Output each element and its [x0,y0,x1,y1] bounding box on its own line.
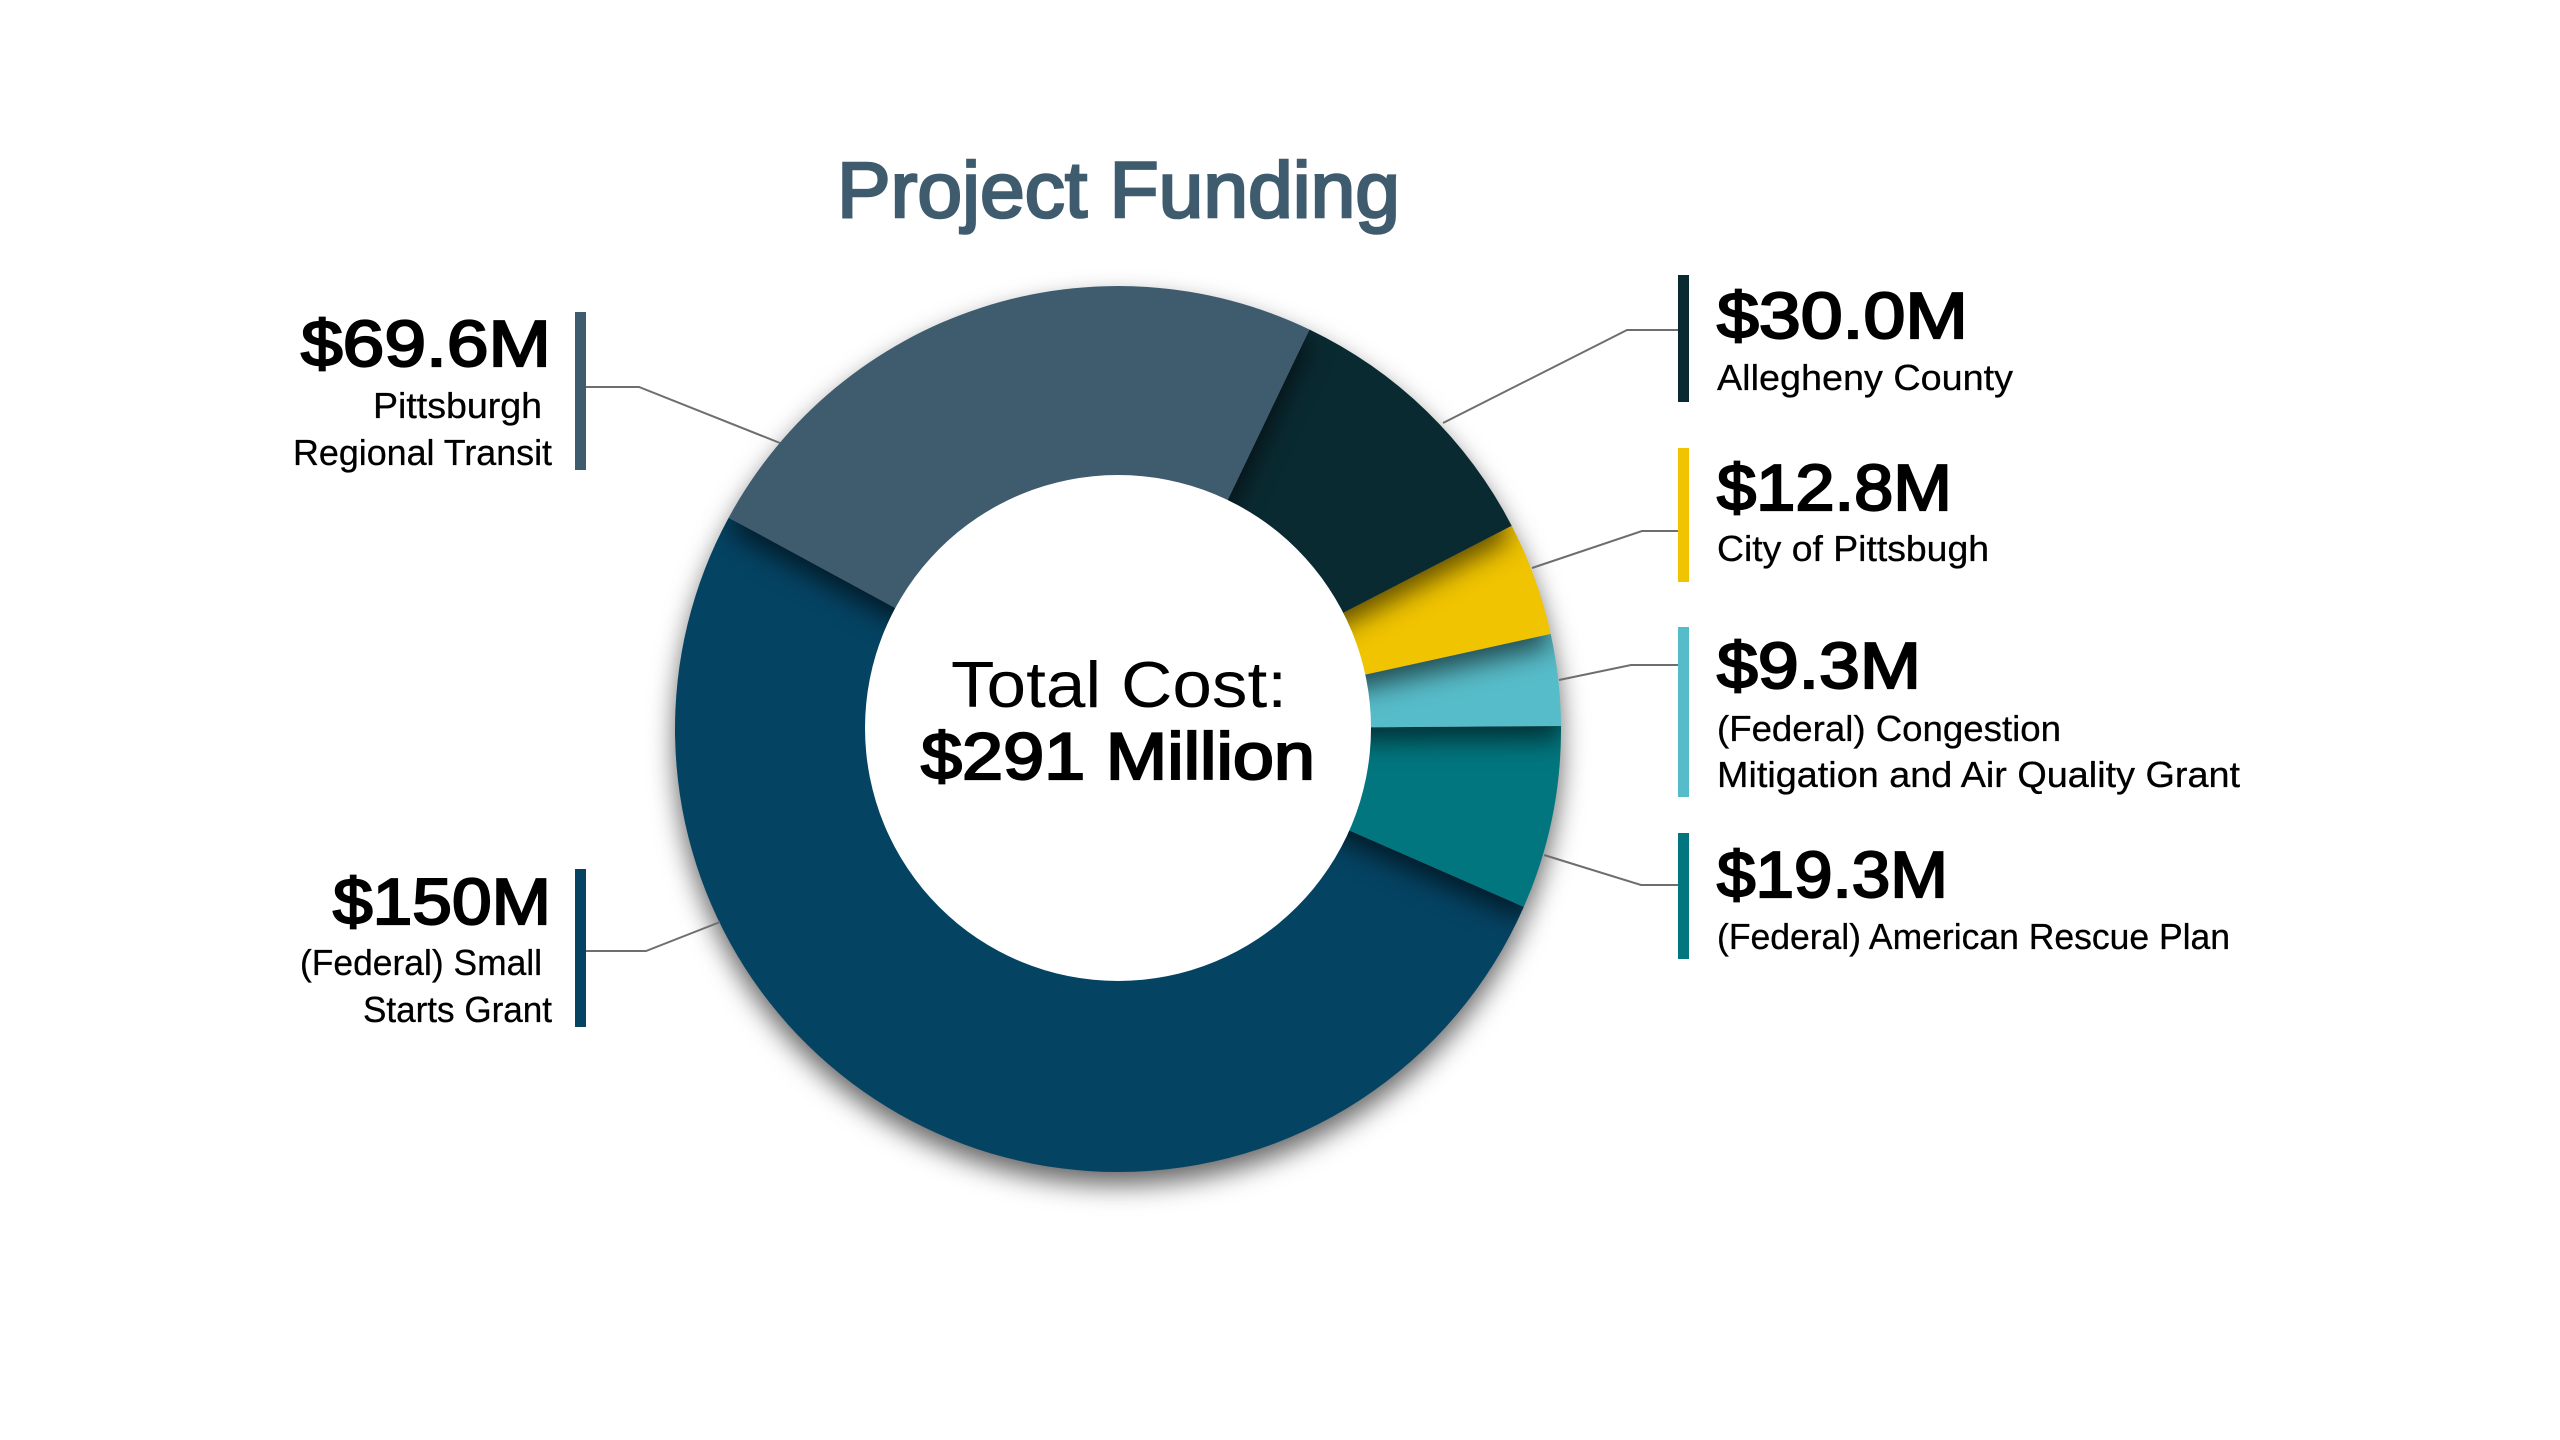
leader line [1443,330,1679,423]
label: Regional Transit [293,432,552,473]
color bar [1678,448,1689,582]
title: Project Funding [837,145,1400,234]
amount: $19.3M [1717,838,1948,911]
donut hole [865,475,1371,981]
leader line [1544,855,1679,885]
leader line [586,387,780,443]
label: Mitigation and Air Quality Grant [1717,754,2240,795]
label: City of Pittsbugh [1717,528,1989,569]
callout: federal small starts grant [300,865,720,1030]
amount: $12.8M [1717,451,1952,524]
color bar [575,869,586,1027]
total cost caption: Total Cost: [951,648,1287,721]
callout: congestion mitigation and air quality grant [1559,627,2240,797]
center label [921,648,1315,793]
amount: $69.6M [301,307,551,380]
label: Pittsburgh [373,385,542,426]
label: (Federal) American Rescue Plan [1717,916,2230,957]
callout: american rescue plan [1544,833,2230,959]
leader line [1532,531,1679,568]
label [293,385,552,473]
label: Allegheny County [1717,357,2013,398]
color bar [1678,627,1689,797]
wedge: city of pittsburgh [1118,526,1551,729]
label: Starts Grant [363,989,552,1030]
wedge: allegheny county [1118,330,1512,729]
label [1717,708,2240,795]
label: (Federal) Congestion [1717,708,2061,749]
color bar [1678,275,1689,402]
wedge: american rescue plan [1118,726,1561,907]
label: (Federal) Small [300,942,542,983]
callout: city of pittsburgh [1532,448,1989,582]
leader line [586,922,720,951]
donut chart [675,286,1561,1172]
callout: allegheny county [1443,275,2013,423]
wedge: congestion mitigation [1118,634,1561,729]
amount: $30.0M [1717,279,1968,352]
wedge: federal small starts grant [675,518,1524,1172]
color bar [1678,833,1689,959]
color bar [575,312,586,470]
amount: $9.3M [1717,629,1921,702]
amount: $150M [333,865,551,938]
total cost value: $291 Million [921,719,1315,793]
callout: pittsburgh regional transit [293,307,780,473]
label [300,942,552,1030]
wedge: pittsburgh regional transit [729,286,1309,729]
leader line [1559,665,1679,680]
